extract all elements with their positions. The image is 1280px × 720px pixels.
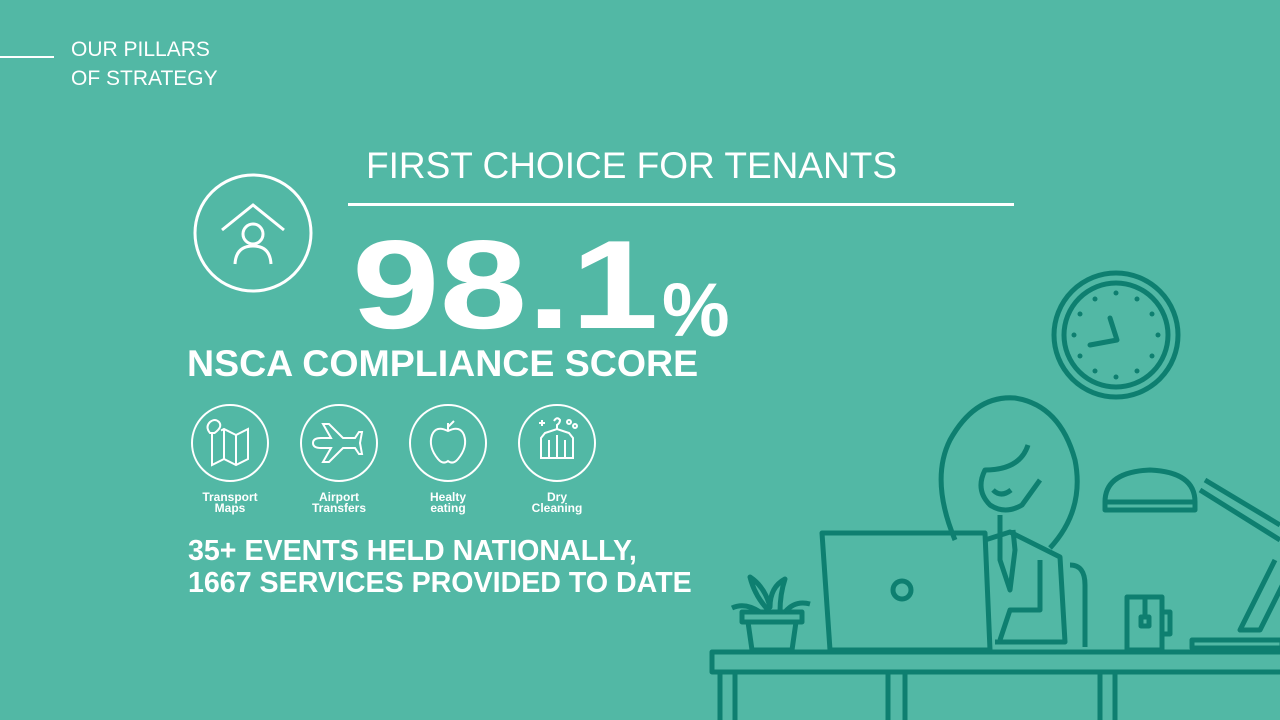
lamp [1105,470,1280,648]
header: pillars of strategy: OUR PILLARS [71,38,210,61]
mug [1127,597,1170,650]
title: FIRST CHOICE FOR TENANTS [366,145,897,186]
big number: % [662,268,730,353]
clock [1054,273,1178,397]
icon: transport maps: Transport [202,490,258,504]
header: pillars of strategy [0,38,218,90]
title [348,145,1014,206]
icon: dry cleaning: Cleaning [532,501,582,515]
stats text: 1667 SERVICES PROVIDED TO DATE [188,567,692,599]
icon: dry cleaning [518,404,596,515]
icon: airport transfers: Airport [319,490,359,504]
subtitle: NSCA COMPLIANCE SCORE [187,342,698,384]
header: pillars of strategy: OF STRATEGY [71,67,218,90]
icon: airport transfers: Transfers [312,501,366,515]
icon: healthy eating: eating [430,501,466,515]
laptop [822,533,990,650]
icon: transport maps: Maps [215,501,245,515]
woman [941,398,1085,647]
stats text [188,535,692,599]
illustration: woman at desk [710,270,1280,720]
plant [732,577,810,650]
icon: healthy eating [409,404,487,515]
big number: 98.1 [352,214,659,355]
icon: airport transfers [300,404,378,515]
icon: transport maps [191,404,269,515]
services icons row [191,404,596,515]
icon: dry cleaning: Dry [547,490,567,504]
stats text: 35+ EVENTS HELD NATIONALLY, [188,535,637,567]
desk [712,652,1280,720]
icon: house with person [194,174,312,292]
icon: healthy eating: Healty [430,490,466,504]
